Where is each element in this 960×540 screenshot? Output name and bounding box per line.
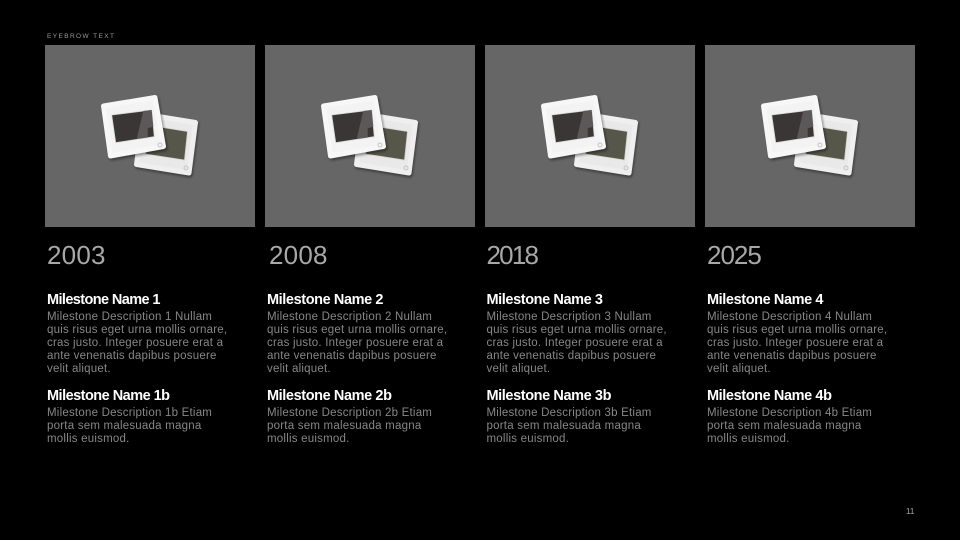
milestone description 3: cras justo. Integer posuere erat a xyxy=(486,336,663,348)
milestone column 1 xyxy=(47,240,227,444)
milestone description 1: quis risus eget urna mollis ornare, xyxy=(47,324,227,336)
milestone name 1: Milestone Name 1 xyxy=(47,292,160,308)
milestone description 2b: Milestone Description 2b Etiam xyxy=(267,406,432,418)
milestone description 1b xyxy=(47,406,212,444)
milestone description 4: quis risus eget urna mollis ornare, xyxy=(707,324,887,336)
milestone description 3b: Milestone Description 3b Etiam xyxy=(486,406,652,418)
milestone name 4: Milestone Name 4 xyxy=(707,292,823,308)
icon: photo slides xyxy=(761,95,860,178)
page number: 11 xyxy=(906,507,914,516)
milestone description 1: Milestone Description 1 Nullam xyxy=(47,310,212,322)
milestone column 3 xyxy=(486,240,667,444)
milestone description 2: quis risus eget urna mollis ornare, xyxy=(267,324,447,336)
milestone description 2: velit aliquet. xyxy=(267,362,331,374)
eyebrow text: EYEBROW TEXT xyxy=(47,33,115,40)
milestone name 2: Milestone Name 2 xyxy=(267,292,383,308)
milestone description 1 xyxy=(47,310,227,374)
milestone name 3b: Milestone Name 3b xyxy=(486,388,611,404)
milestone description 2b: mollis euismod. xyxy=(267,432,350,444)
milestone column 4 xyxy=(707,240,887,444)
milestone description 1: cras justo. Integer posuere erat a xyxy=(47,336,223,348)
panel: image 2 xyxy=(265,45,475,227)
milestone description 3: velit aliquet. xyxy=(486,362,550,374)
milestone name 4b: Milestone Name 4b xyxy=(707,388,832,404)
milestone description 4b: Milestone Description 4b Etiam xyxy=(707,406,872,418)
milestone description 3b: mollis euismod. xyxy=(486,432,569,444)
year: 2008 xyxy=(269,240,328,270)
milestone description 2b: porta sem malesuada magna xyxy=(267,420,421,432)
milestone description 1: ante venenatis dapibus posuere xyxy=(47,350,217,362)
year: 2025 xyxy=(707,240,761,270)
milestone description 2: cras justo. Integer posuere erat a xyxy=(267,336,443,348)
milestone description 2 xyxy=(267,310,447,374)
milestone description 4b: mollis euismod. xyxy=(707,432,790,444)
panel: image 3 xyxy=(485,45,695,227)
panel: image 4 xyxy=(705,45,915,227)
milestone description 3b: porta sem malesuada magna xyxy=(486,420,641,432)
milestone description 2: ante venenatis dapibus posuere xyxy=(267,350,437,362)
milestone name 2b: Milestone Name 2b xyxy=(267,388,392,404)
panel: image 1 xyxy=(45,45,255,227)
milestone description 4b xyxy=(707,406,872,444)
milestone description 3: Milestone Description 3 Nullam xyxy=(486,310,652,322)
milestone description 2: Milestone Description 2 Nullam xyxy=(267,310,432,322)
milestone description 4 xyxy=(707,310,887,374)
milestone description 4: cras justo. Integer posuere erat a xyxy=(707,336,883,348)
milestone description 1b: Milestone Description 1b Etiam xyxy=(47,406,212,418)
milestone description 3b xyxy=(486,406,652,444)
milestone description 1b: mollis euismod. xyxy=(47,432,130,444)
milestone description 3: ante venenatis dapibus posuere xyxy=(486,350,656,362)
icon: photo slides xyxy=(541,95,640,178)
milestone description 3: quis risus eget urna mollis ornare, xyxy=(486,324,667,336)
milestone description 4: velit aliquet. xyxy=(707,362,771,374)
year: 2018 xyxy=(486,240,537,270)
milestone description 3 xyxy=(486,310,667,374)
milestone name 3: Milestone Name 3 xyxy=(486,292,603,308)
milestone description 1b: porta sem malesuada magna xyxy=(47,420,201,432)
icon: photo slides xyxy=(321,95,420,178)
milestone description 4b: porta sem malesuada magna xyxy=(707,420,861,432)
year: 2003 xyxy=(47,240,106,270)
milestone description 4: ante venenatis dapibus posuere xyxy=(707,350,877,362)
milestone description 1: velit aliquet. xyxy=(47,362,111,374)
milestone name 1b: Milestone Name 1b xyxy=(47,388,170,404)
milestone column 2 xyxy=(267,240,447,444)
milestone description 4: Milestone Description 4 Nullam xyxy=(707,310,872,322)
icon: photo slides xyxy=(101,95,200,178)
milestone description 2b xyxy=(267,406,432,444)
